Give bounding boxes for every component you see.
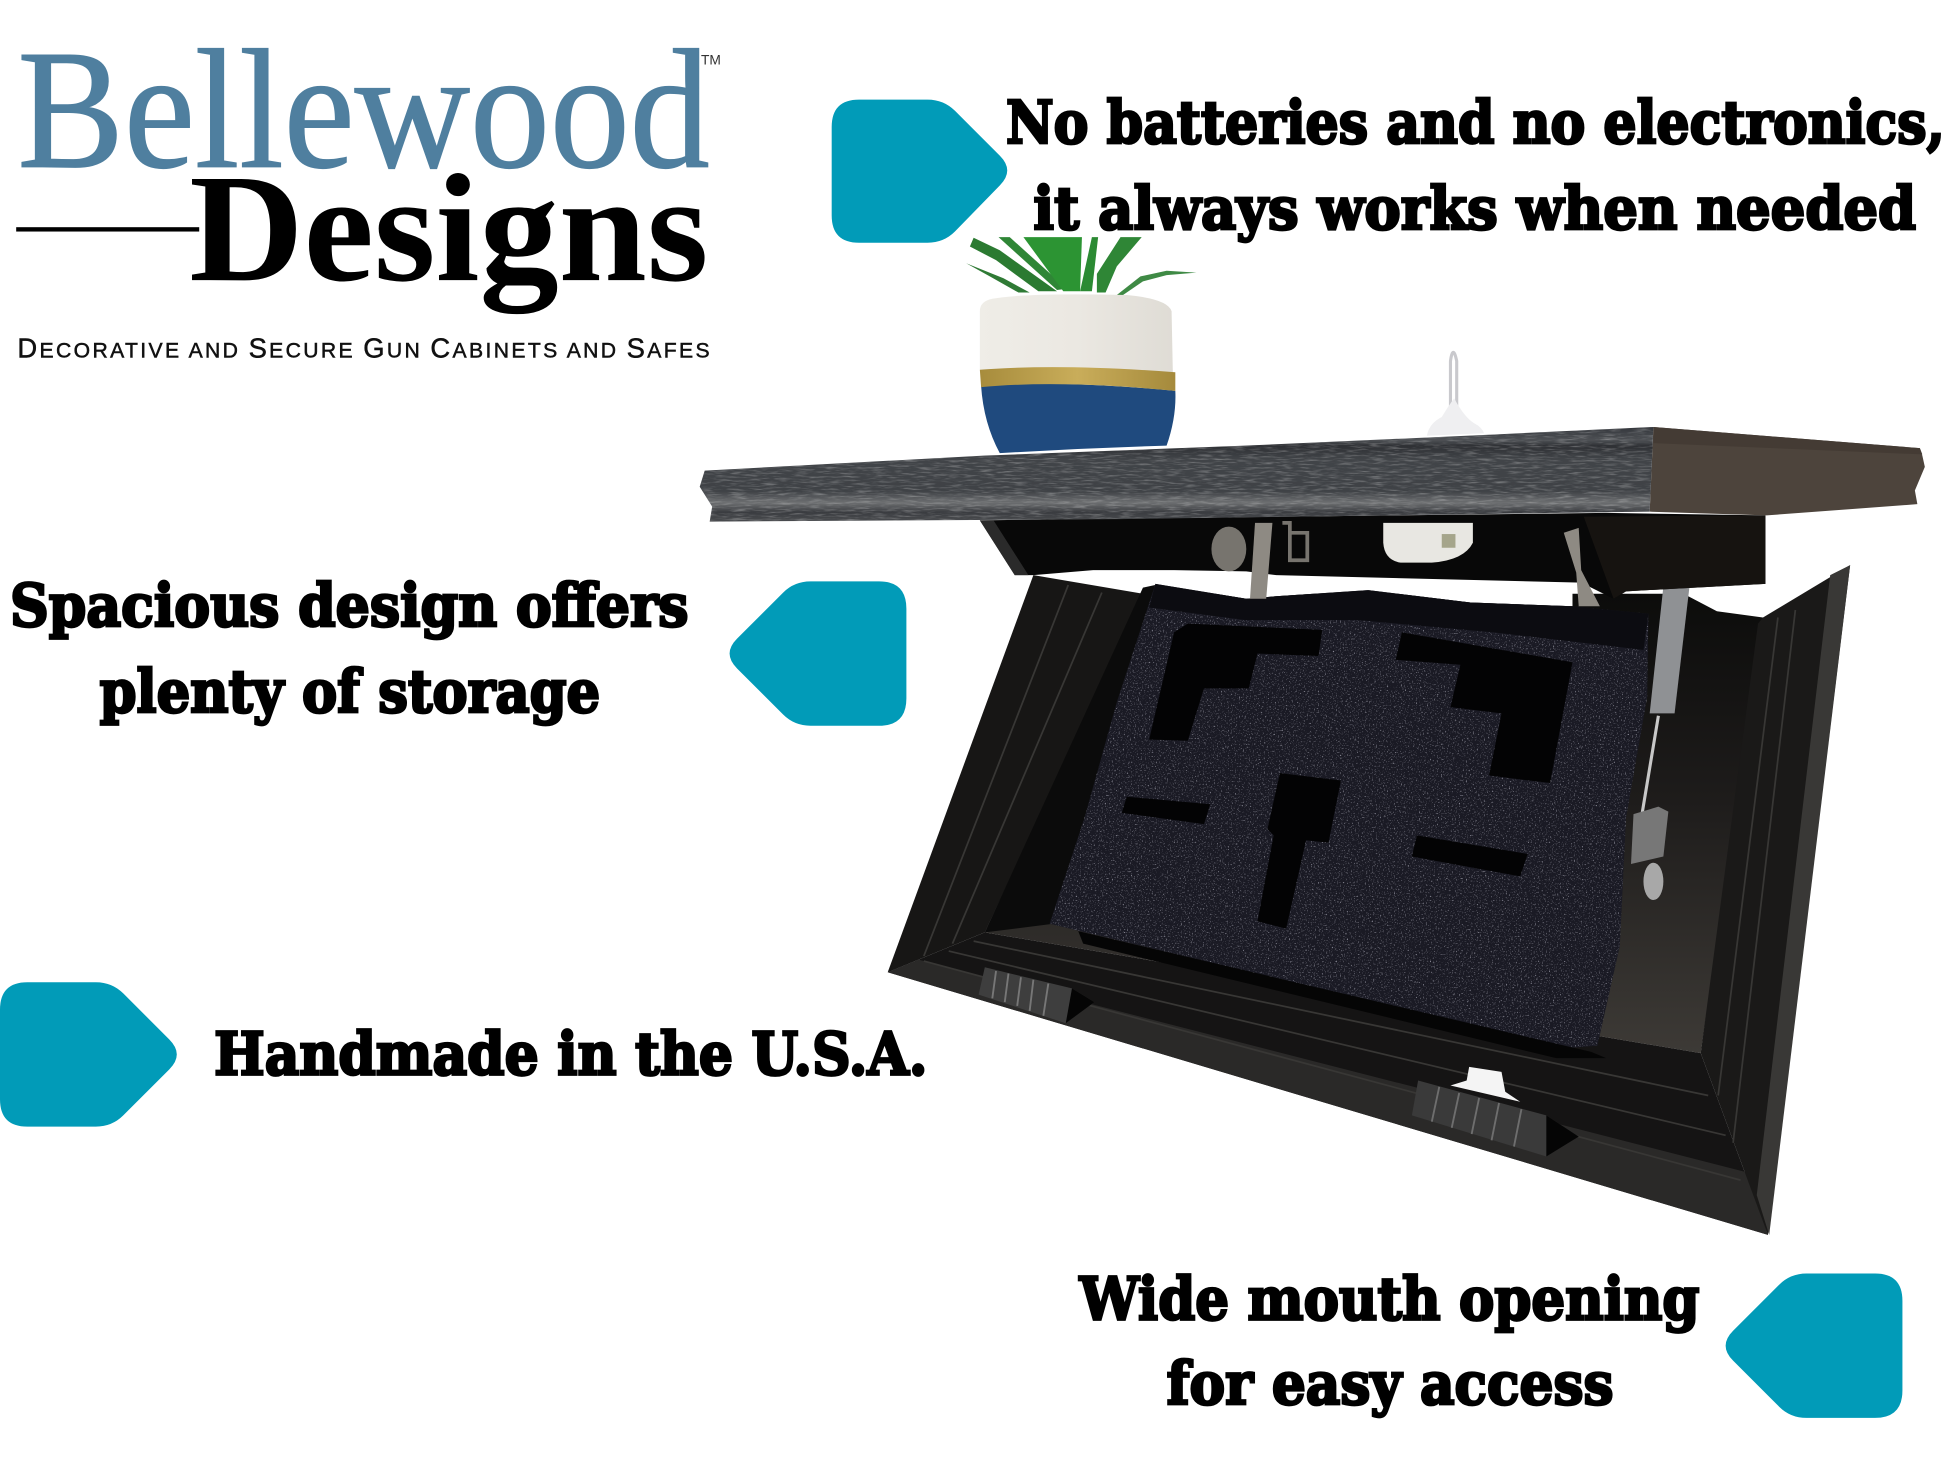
product: wall shelf gun cabinet	[700, 237, 1925, 1235]
shadow beside foam	[985, 584, 1160, 932]
under-shelf mount	[980, 513, 1765, 599]
arrow: wide mouth callout	[1726, 1274, 1902, 1418]
callout text: wide mouth: Wide mouth opening	[1079, 1265, 1699, 1334]
power cord and plug	[1427, 352, 1484, 436]
foam insert	[1050, 584, 1648, 1048]
door frame: back panel	[985, 594, 1763, 1053]
callout text: wide mouth	[1079, 1265, 1699, 1418]
door frame: left wall	[888, 575, 1143, 972]
shelf front face	[700, 427, 1653, 522]
callout text: spacious design	[10, 571, 689, 726]
logo wordmark: Bellewood: Bellewood	[17, 15, 710, 204]
door frame: right wall	[1701, 565, 1850, 1235]
plant leaves	[966, 237, 1196, 295]
foam shadow on floor	[1078, 931, 1606, 1058]
arrow: top callout	[832, 100, 1007, 243]
frame grooves	[924, 585, 1795, 1180]
arrow: spacious callout	[730, 581, 906, 726]
gas strut	[1631, 586, 1690, 900]
door feet	[979, 967, 1579, 1156]
trademark: TM	[701, 53, 721, 68]
plant pot	[980, 294, 1175, 453]
door frame: floor	[888, 932, 1768, 1235]
white magnetic lock	[1383, 523, 1473, 563]
shelf side end	[1650, 427, 1925, 515]
white gap above foam	[1093, 566, 1572, 606]
callout text: no batteries	[1006, 88, 1945, 243]
white latch tab	[1450, 1067, 1520, 1102]
logo: Bellewood Designs	[16, 15, 721, 363]
callout text: wide mouth: for easy access	[1167, 1349, 1614, 1418]
hinges and fittings	[1211, 523, 1600, 606]
arrow: handmade callout	[0, 982, 177, 1127]
logo tagline: DECORATIVE AND SECURE GUN CABINETS AND SAFES	[17, 332, 710, 363]
door frame: outer lower edge	[888, 960, 1768, 1235]
callout text: spacious design: Spacious design offers	[10, 571, 689, 640]
callout text: spacious design: plenty of storage	[100, 657, 600, 726]
logo wordmark: Designs: Designs	[189, 143, 708, 314]
foam cutouts	[1122, 624, 1572, 929]
logo rule	[16, 227, 199, 232]
callout text: handmade: Handmade in the U.S.A.	[214, 1019, 928, 1088]
